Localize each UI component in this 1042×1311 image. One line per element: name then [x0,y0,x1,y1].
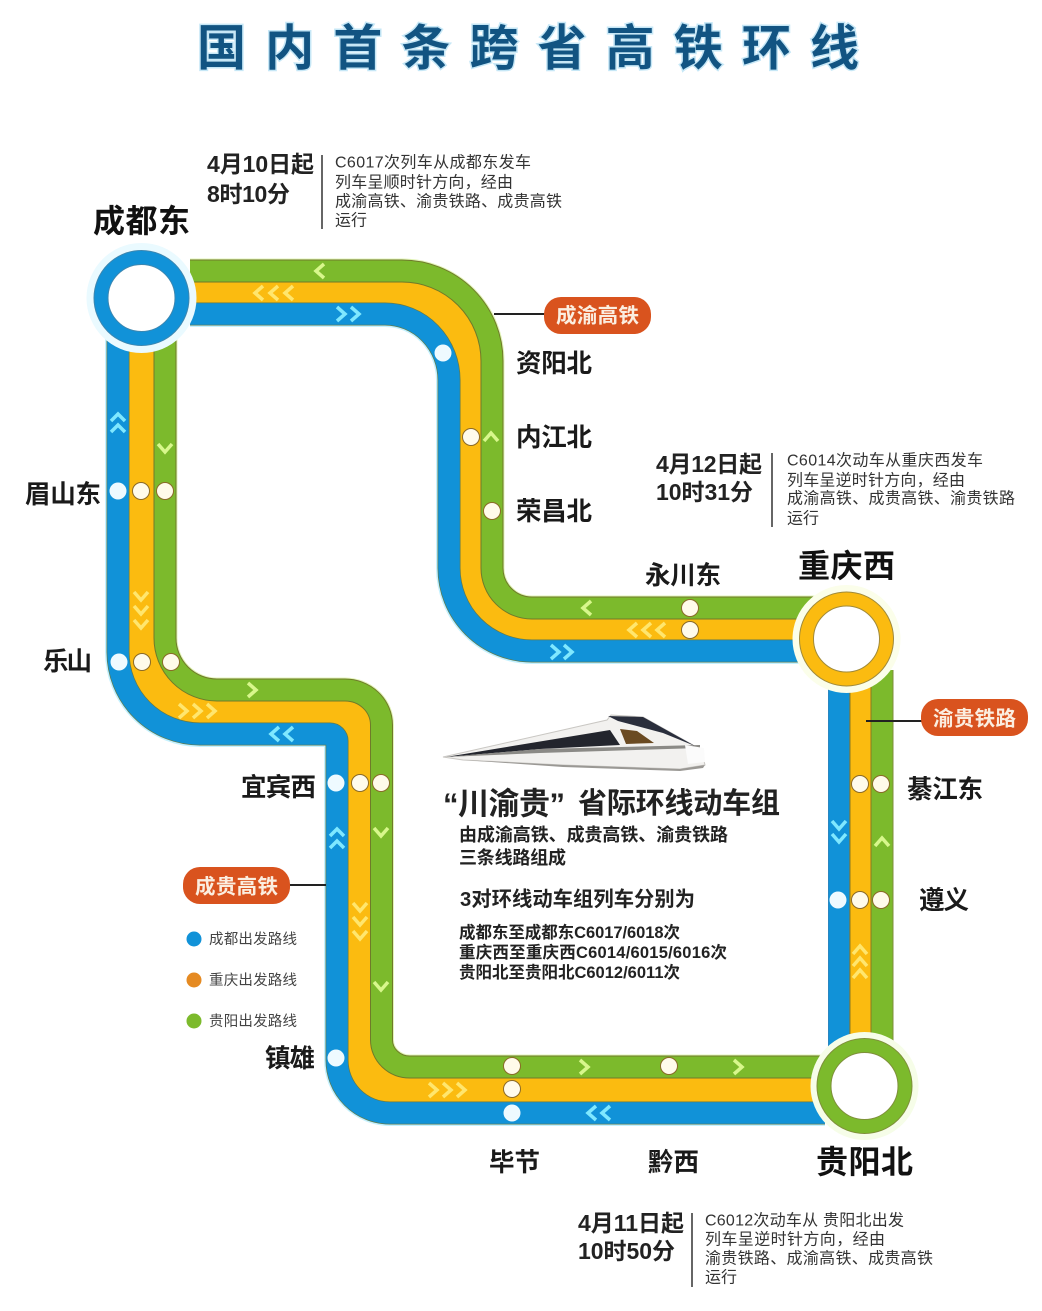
info block: Chongqing departure: 4月12日起 [656,451,762,477]
legend: 重庆出发路线 [209,972,297,989]
center heading: “川渝贵” [443,786,565,822]
info block: Chongqing departure: 运行 [787,510,819,528]
info block: Chengdu departure: 成渝高铁、渝贵铁路、成贵高铁 [335,192,562,210]
legend: 成都出发路线 [209,931,297,948]
station labels: 綦江东 [907,776,983,804]
illustration: high-speed train [443,715,705,771]
legend [186,931,297,1030]
info block: Guiyang departure: 渝贵铁路、成渝高铁、成贵高铁 [705,1250,933,1268]
info block: Chengdu departure: 运行 [335,212,367,230]
info block: Chongqing departure: 成渝高铁、成贵高铁、渝贵铁路 [787,490,1015,508]
direction arrows [111,264,889,1120]
route network [118,271,882,1113]
center heading continued: 省际环线动车组 [578,787,780,820]
info block: Chongqing departure: 10时31分 [656,479,753,505]
station labels: 黔西 [648,1148,699,1177]
line: Yugui railway, right section [839,670,882,1060]
station labels: 毕节 [489,1149,540,1177]
station labels: 荣昌北 [516,498,592,526]
station labels: 宜宾西 [241,774,316,802]
title: 国内首条跨省高铁环线 [197,22,859,76]
description line two: 三条线路组成 [459,847,566,868]
line badge: Chenggui high-speed rail [183,867,326,904]
hub labels [93,203,913,1180]
line badge: Yugui railway [866,699,1028,736]
station labels: 镇雄 [265,1045,315,1073]
hub labels: 成都东 [93,203,190,239]
info block: Guiyang departure: 运行 [705,1268,737,1286]
info block: Chengdu departure: 列车呈顺时针方向，经由 [335,174,513,192]
info block: Guiyang departure: C6012次动车从 贵阳北出发 [705,1212,904,1230]
line badge: Chengyu high-speed rail [494,297,651,334]
line badge: Chenggui high-speed rail: 成贵高铁 [195,874,278,898]
info block: Chongqing departure: C6014次动车从重庆西发车 [787,452,983,470]
center text block [443,786,780,982]
hub: Chengdu East ring [86,243,196,353]
train pair three: 贵阳北至贵阳北C6012/6011次 [459,963,680,982]
station labels [25,350,983,1177]
legend: 贵阳出发路线 [209,1013,297,1030]
info block: Chengdu departure: C6017次列车从成都东发车 [335,154,531,172]
line badge: Yugui railway: 渝贵铁路 [933,706,1016,730]
info block: Guiyang departure: 4月11日起 [578,1210,684,1236]
station markers [110,344,890,1122]
station labels: 眉山东 [25,481,101,509]
station labels: 资阳北 [516,350,592,378]
info block: Chengdu departure: 4月10日起 [207,151,314,177]
hub labels: 重庆西 [798,548,895,584]
info block: Chengdu departure [207,151,562,230]
info block: Chongqing departure: 列车呈逆时针方向，经由 [787,472,965,490]
station labels: 永川东 [645,562,721,590]
info block: Chengdu departure: 8时10分 [207,181,290,207]
title: 国内首条跨省高铁环线 [197,22,859,76]
line: Chengyu high-speed rail, upper section [190,271,815,651]
info block: Guiyang departure: 10时50分 [578,1238,675,1264]
station labels: 内江北 [516,424,592,452]
train pair two: 重庆西至重庆西C6014/6015/6016次 [459,942,728,962]
subheading: 3对环线动车组列车分别为 [460,887,695,911]
line: Chenggui high-speed rail, left section [118,335,825,1113]
hub: Guiyang North ring [810,1032,918,1140]
line badge: Chengyu high-speed rail: 成渝高铁 [556,304,640,328]
info block: Guiyang departure: 列车呈逆时针方向，经由 [705,1230,885,1248]
hub labels: 贵阳北 [816,1144,913,1180]
description: 由成渝高铁、成贵高铁、渝贵铁路 [459,824,728,845]
info block: Guiyang departure [578,1210,933,1287]
train pair one: 成都东至成都东C6017/6018次 [459,922,680,942]
hub: Chongqing West ring [792,585,900,693]
station labels: 乐山 [43,648,92,676]
station labels: 遵义 [919,887,969,915]
info block: Chongqing departure [656,451,1015,528]
